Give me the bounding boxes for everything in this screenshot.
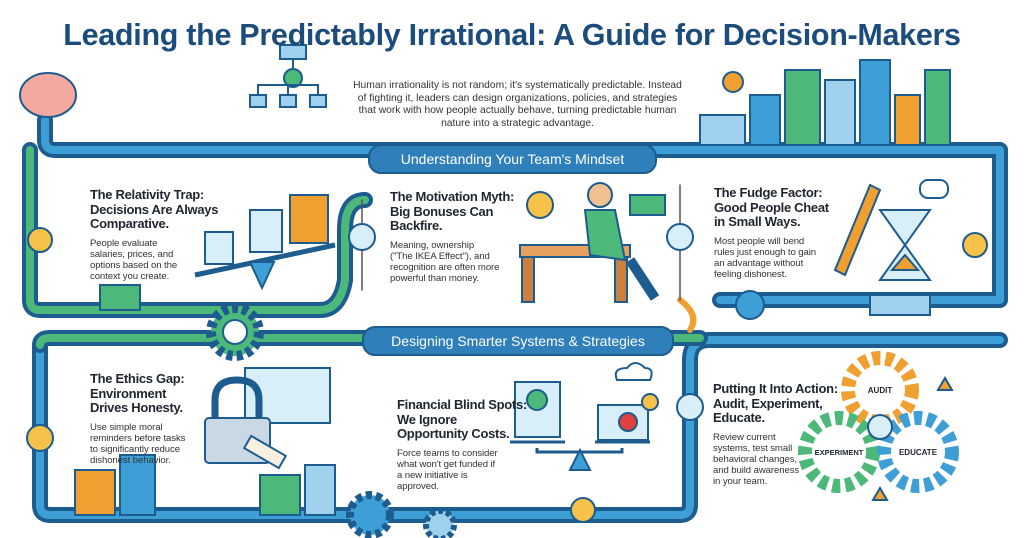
panel: action: Audit, Experiment, <box>713 396 822 410</box>
bottom left city <box>75 285 930 515</box>
panel: fudge: Good People Cheat <box>714 200 829 214</box>
panel: action: Review current <box>713 432 776 442</box>
panel: fudge: The Fudge Factor: <box>714 185 822 200</box>
panel: fudge: feeling dishonest. <box>714 268 787 280</box>
panel: ethics: Drives Honesty. <box>90 400 183 415</box>
panel: financial: Force teams to consider <box>397 448 498 458</box>
panel: financial: We Ignore <box>397 412 457 426</box>
background pipes and illustrations: EXPERIMENT <box>815 448 864 457</box>
gears <box>211 72 764 538</box>
panel: fudge: an advantage without <box>714 258 803 268</box>
panel: motivation: Backfire. <box>390 218 442 233</box>
panel: fudge: Most people will bend <box>714 236 804 246</box>
panel: financial: approved. <box>397 480 439 492</box>
panel: fudge: in Small Ways. <box>714 214 800 229</box>
panel: action: Educate. <box>713 410 765 425</box>
intro text: that work with how people actually behave, turning predictable human <box>359 105 676 116</box>
panel: relativity: options based on the <box>90 260 177 270</box>
table + person <box>520 183 665 302</box>
banner: systems: Designing Smarter Systems & Strategies <box>391 333 645 349</box>
background pipes and illustrations: AUDIT <box>868 386 892 395</box>
ruler, hourglass <box>835 180 948 280</box>
panel: financial: Financial Blind Spots: <box>397 397 527 412</box>
panel: relativity: context you create. <box>90 270 169 282</box>
panel: relativity: Decisions Are Always <box>90 202 218 216</box>
panel: fudge: rules just enough to gain <box>714 246 816 258</box>
buildings <box>700 60 950 145</box>
docs on scale <box>510 363 658 470</box>
intro text: Human irrationality is not random; it's systematically predictable. Instead <box>353 80 682 91</box>
intro text: of fighting it, leaders can design organizations, policies, and strategies <box>358 92 677 104</box>
banner: systems <box>362 326 674 356</box>
seesaw, bags <box>195 195 335 288</box>
panel: ethics: to significantly reduce <box>90 444 180 454</box>
panel: action: Putting It Into Action: <box>713 381 838 396</box>
panel: relativity: Comparative. <box>90 216 169 231</box>
panel: ethics: The Ethics Gap: <box>90 371 184 386</box>
panel: action: systems, test small <box>713 442 792 454</box>
panel: action: and build awareness <box>713 464 799 476</box>
title: Leading the Predictably Irrational: A Guide for Decision-Makers <box>63 18 961 52</box>
panel: motivation <box>390 189 514 284</box>
action gears <box>805 358 952 500</box>
banner: mindset <box>368 144 657 174</box>
icons on pipes <box>27 224 987 522</box>
lock + board <box>205 368 330 468</box>
intro text: nature into a strategic advantage. <box>441 118 594 128</box>
panel: relativity: The Relativity Trap: <box>90 187 204 202</box>
panel: relativity <box>90 187 218 282</box>
panel: ethics <box>90 371 186 466</box>
panel: motivation: Meaning, ownership <box>390 240 474 250</box>
panel: motivation: recognition are often more <box>390 262 499 272</box>
panel: motivation: powerful than money. <box>390 272 479 284</box>
panel: motivation: ("The IKEA Effect"), and <box>390 250 490 262</box>
panel: financial: Opportunity Costs. <box>397 426 509 441</box>
panel: relativity: People evaluate <box>90 238 157 248</box>
panel: action: behavioral changes, <box>713 454 797 464</box>
panel: motivation: Big Bonuses Can <box>390 204 493 218</box>
banner: mindset: Understanding Your Team's Mindset <box>401 151 624 167</box>
panel: relativity: salaries, prices, and <box>90 248 173 260</box>
panel: fudge <box>714 185 829 280</box>
panel: ethics: reminders before tasks <box>90 432 185 444</box>
flowchart <box>250 45 326 107</box>
intro text <box>353 80 682 128</box>
panel: action <box>713 381 838 486</box>
panel: action: in your team. <box>713 476 767 486</box>
panel: ethics: Environment <box>90 386 166 400</box>
panel: financial <box>397 397 527 492</box>
panel: financial: what won't get funded if <box>397 458 495 470</box>
background pipes and illustrations: EDUCATE <box>899 448 938 457</box>
brain <box>20 73 76 117</box>
panel: motivation: The Motivation Myth: <box>390 189 514 204</box>
panel: financial: a new initiative is <box>397 470 468 480</box>
panel: ethics: dishonest behavior. <box>90 454 171 466</box>
panel: ethics: Use simple moral <box>90 422 163 432</box>
